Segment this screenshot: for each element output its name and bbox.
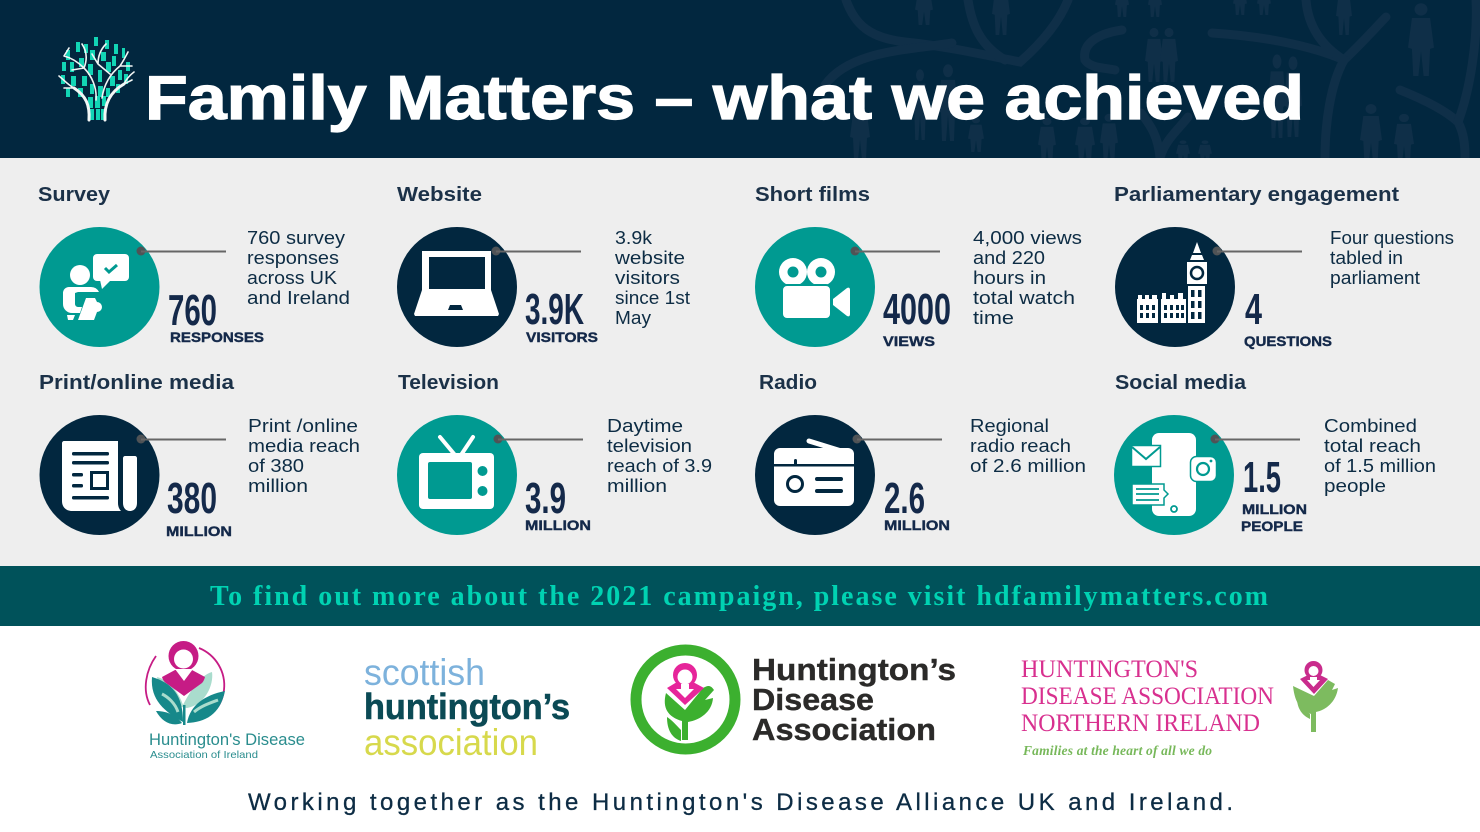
stat: 380 million: 380	[167, 474, 217, 523]
logo: Scottish Huntington's Association: scottish	[364, 652, 485, 693]
description: 3.9k	[615, 228, 653, 248]
leader line	[1212, 246, 1302, 256]
description: of 380	[248, 456, 304, 476]
stat: 2.6 million: MILLION	[884, 517, 950, 533]
description: since 1st	[615, 288, 690, 308]
logo: Huntington's Disease Association Northern Ireland: DISEASE ASSOCIATION	[1021, 683, 1274, 710]
panel: television	[397, 371, 712, 535]
stat: 3.9K visitors: VISITORS	[526, 329, 598, 345]
description: May	[615, 308, 651, 328]
description: Combined	[1324, 416, 1417, 436]
description: million	[248, 476, 308, 496]
heading: television: Television	[398, 371, 499, 394]
description: tabled in	[1330, 248, 1403, 268]
heading: short films: Short films	[755, 183, 870, 206]
heading: social media: Social media	[1115, 371, 1247, 394]
leader line	[494, 434, 583, 444]
description: 4,000 views	[973, 228, 1082, 248]
description: total watch	[973, 288, 1075, 308]
logo: Scottish Huntington's Association: huntington’s	[364, 686, 570, 727]
description: media reach	[248, 436, 360, 456]
description: website	[614, 248, 685, 268]
logo: Scottish Huntington's Association: association	[364, 722, 538, 763]
stat: 4 questions: 4	[1245, 285, 1262, 334]
logo: Huntington's Disease Association Northern Ireland: NORTHERN IRELAND	[1021, 710, 1260, 737]
logo: Huntington's Disease Association of Ireland	[146, 641, 305, 761]
description: 760 survey	[247, 228, 345, 248]
header banner	[0, 0, 1480, 163]
description: Print /online	[248, 416, 358, 436]
panel: print/online media	[39, 371, 360, 539]
description: responses	[247, 248, 339, 268]
panel: website	[397, 183, 690, 347]
stat: 760 responses	[168, 286, 264, 345]
icon: laptop	[397, 227, 517, 347]
stat: 1.5 million people: MILLION	[1242, 501, 1307, 517]
leader line	[492, 246, 581, 256]
icon: television	[397, 415, 517, 535]
leader line	[136, 246, 226, 256]
panel: social media	[1114, 371, 1436, 535]
logo: Huntington's Disease Association Northern Ireland	[1021, 656, 1338, 758]
title: Family Matters – what we achieved	[145, 64, 1304, 133]
logo: Huntington's Disease Association: Association	[752, 712, 936, 747]
description: of 2.6 million	[970, 456, 1086, 476]
description: total reach	[1324, 436, 1421, 456]
panel: radio	[755, 371, 1086, 535]
panel: parliamentary engagement	[1114, 183, 1454, 349]
icon: survey respondent with speech bubble	[40, 227, 160, 347]
description: people	[1324, 476, 1386, 496]
panel: short films	[755, 183, 1082, 349]
logo: Huntington's Disease Association of Ireland: Huntington's Disease	[149, 730, 305, 749]
logo: Huntington's Disease Association of Ireland: Association of Ireland	[150, 749, 258, 761]
description: parliament	[1330, 268, 1420, 288]
description: reach of 3.9	[607, 456, 712, 476]
icon: Big Ben and parliament	[1115, 227, 1235, 347]
stat: 1.5 million people	[1241, 453, 1307, 534]
heading: parliamentary engagement: Parliamentary engagement	[1114, 183, 1399, 206]
logo: Scottish Huntington's Association	[364, 652, 570, 763]
panel: stats background	[0, 158, 1480, 566]
logo: Huntington's Disease Association Northern Ireland: Families at the heart of all we do	[1022, 743, 1212, 758]
leader line	[1210, 434, 1300, 444]
description: time	[973, 308, 1014, 328]
stat: 4000 views: VIEWS	[883, 333, 935, 349]
icon: radio	[755, 415, 875, 535]
leader line	[850, 246, 940, 256]
leader line	[136, 434, 226, 444]
icon: smartphone with social apps	[1114, 415, 1234, 535]
logo: Huntington's Disease Association Northern Ireland: HUNTINGTON'S	[1021, 656, 1198, 683]
heading: website: Website	[397, 183, 482, 206]
logo: Huntington's Disease Association: Disease	[752, 682, 874, 717]
stat: 380 million: MILLION	[166, 523, 232, 539]
heading: print/online media: Print/online media	[39, 371, 235, 394]
stat: 760 responses: 760	[168, 286, 217, 335]
stat: 380 million	[166, 474, 232, 539]
call to action band: To find out more about the 2021 campaign, please visit hdfamilymatters.com	[210, 581, 1268, 612]
panel: survey	[38, 183, 350, 347]
description: Four questions	[1330, 228, 1454, 248]
stat: 760 responses: RESPONSES	[170, 329, 264, 345]
footer statement: Working together as the Huntington's Disease Alliance UK and Ireland.	[248, 789, 1233, 816]
stat: 4000 views: 4000	[883, 285, 951, 334]
heading: survey: Survey	[38, 183, 111, 206]
logo: Huntington's Disease Association	[636, 650, 956, 749]
description: television	[607, 436, 692, 456]
stat: 3.9K visitors: 3.9K	[525, 285, 584, 334]
call to action band	[0, 566, 1480, 626]
description: Daytime	[607, 416, 683, 436]
description: and 220	[973, 248, 1045, 268]
icon: video camera	[755, 227, 875, 347]
description: hours in	[973, 268, 1046, 288]
heading: radio: Radio	[759, 371, 817, 394]
description: Regional	[970, 416, 1049, 436]
description: across UK	[247, 268, 337, 288]
stat: 4 questions	[1244, 285, 1332, 349]
leader line	[852, 434, 942, 444]
stat: 4000 views	[883, 285, 951, 349]
logo: Huntington's Disease Association: Huntington’s	[752, 652, 956, 687]
stat: 1.5 million people: 1.5	[1243, 453, 1281, 502]
description: radio reach	[970, 436, 1071, 456]
description: visitors	[615, 268, 680, 288]
stat: 1.5 million people: PEOPLE	[1241, 518, 1303, 534]
description: million	[607, 476, 667, 496]
stat: 3.9 million: MILLION	[525, 517, 591, 533]
description: and Ireland	[247, 288, 350, 308]
stat: 2.6 million: 2.6	[884, 474, 925, 523]
description: of 1.5 million	[1324, 456, 1436, 476]
icon: newspaper	[40, 415, 160, 535]
stat: 3.9K visitors	[525, 285, 598, 345]
stat: 3.9 million: 3.9	[525, 474, 566, 523]
stat: 4 questions: QUESTIONS	[1244, 333, 1332, 349]
icon: family tree logo	[59, 37, 134, 120]
